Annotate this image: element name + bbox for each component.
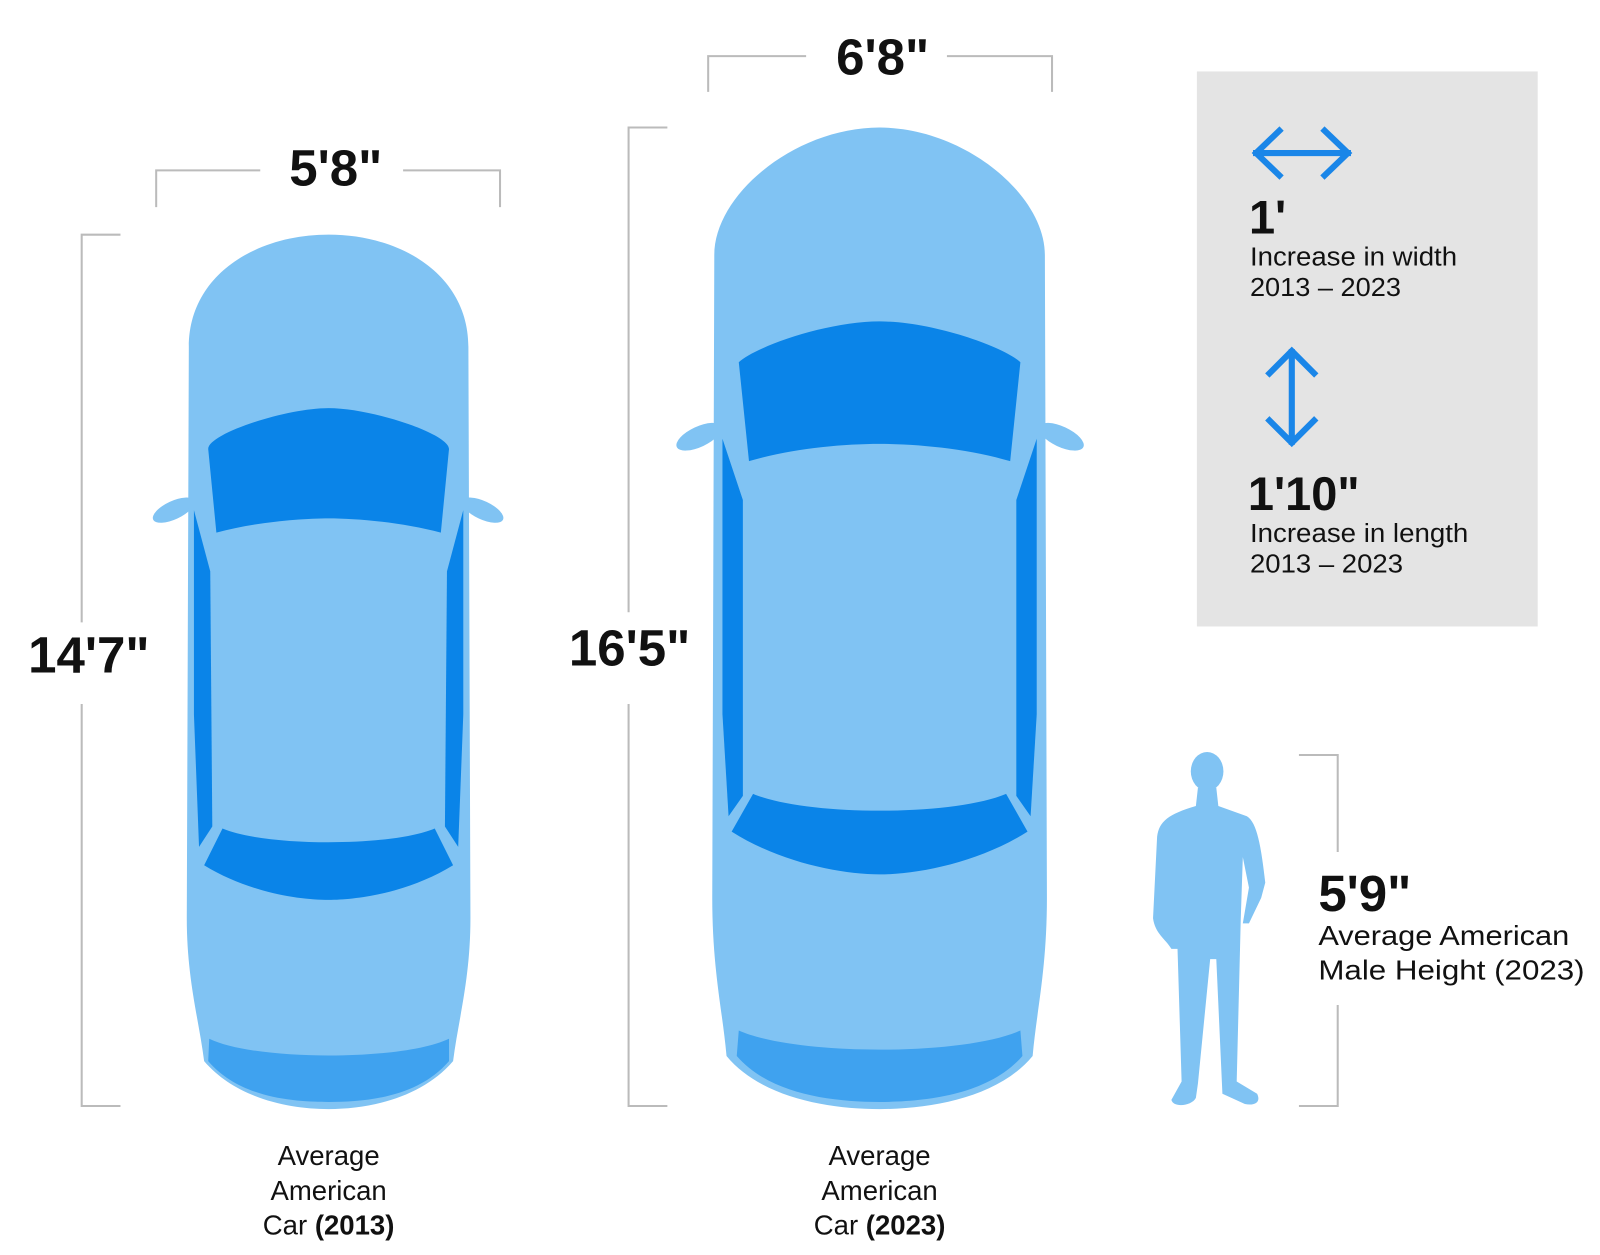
text: length increase bbox=[1248, 468, 1468, 578]
text: width increase: Increase in width bbox=[1250, 243, 1457, 271]
label: car 2013: American bbox=[270, 1175, 387, 1206]
label: 2023 width: 6'8" bbox=[836, 28, 929, 85]
label: car 2013: Car (2013) bbox=[263, 1210, 394, 1241]
label: car 2023: Average bbox=[829, 1140, 931, 1171]
text: width increase: 1' bbox=[1249, 192, 1286, 244]
icon: horizontal arrow bbox=[1253, 129, 1351, 178]
panel: increases bbox=[1197, 71, 1538, 626]
bracket: person height bbox=[1299, 755, 1338, 1106]
text: person height: 5'9" bbox=[1318, 865, 1411, 922]
text: person height: Male Height (2023) bbox=[1318, 955, 1585, 986]
bracket: 2023 length bbox=[629, 128, 667, 1106]
label: 2023 length: 16'5" bbox=[569, 619, 690, 676]
text: person height bbox=[1318, 865, 1585, 986]
bracket: 2023 width bbox=[708, 56, 1052, 92]
text: width increase bbox=[1249, 192, 1457, 302]
label: 2013 length: 14'7" bbox=[28, 626, 150, 683]
text: length increase: 1'10" bbox=[1248, 468, 1360, 520]
bracket: 2013 length bbox=[82, 235, 120, 1106]
car: 2013 bbox=[149, 235, 507, 1109]
text: width increase: 2013 – 2023 bbox=[1250, 274, 1401, 302]
label: 2013 width: 5'8" bbox=[289, 140, 382, 197]
car: 2023 bbox=[672, 128, 1088, 1109]
text: length increase: Increase in length bbox=[1250, 520, 1468, 548]
icon: person silhouette bbox=[1153, 752, 1265, 1105]
label: car 2013 bbox=[263, 1140, 394, 1241]
bracket: 2013 width bbox=[156, 170, 500, 207]
label: car 2023 bbox=[814, 1140, 945, 1241]
icon: vertical arrow bbox=[1267, 349, 1316, 445]
text: length increase: 2013 – 2023 bbox=[1250, 550, 1403, 578]
text: person height: Average American bbox=[1318, 920, 1569, 951]
label: car 2023: Car (2023) bbox=[814, 1210, 945, 1241]
label: car 2023: American bbox=[821, 1175, 938, 1206]
label: car 2013: Average bbox=[278, 1140, 380, 1171]
